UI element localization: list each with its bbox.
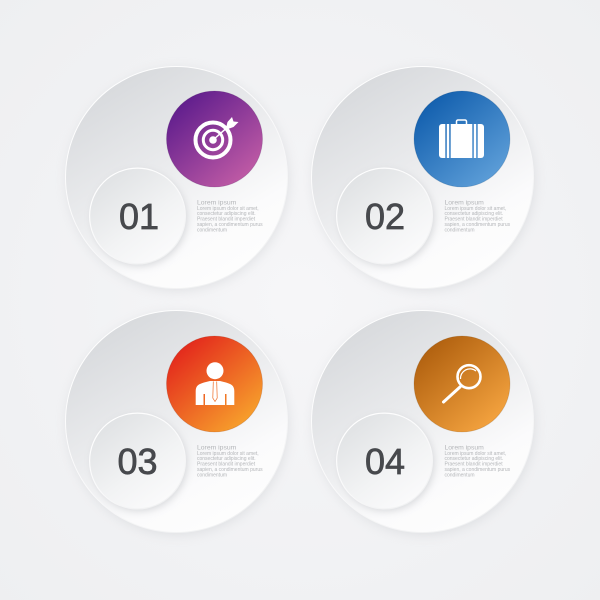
panel disc 01	[65, 66, 288, 290]
panel: step 03	[65, 310, 288, 534]
text block 02: sapien, a condimentum purus	[444, 222, 511, 228]
text block 02: condimentum	[444, 228, 475, 234]
text block 04: Praesent blandit imperdiet	[444, 462, 503, 468]
small number disc 04	[336, 412, 434, 511]
text block 03: consectetur adipiscing elit.	[197, 456, 256, 462]
text block 01: sapien, a condimentum purus	[197, 222, 263, 228]
text block 01: Lorem ipsum	[197, 200, 237, 206]
small number disc 03	[89, 412, 187, 511]
number 04: 04	[365, 441, 405, 482]
text block 04: sapien, a condimentum purus	[444, 467, 511, 473]
colored circle: blue	[414, 91, 510, 187]
text block 03: Lorem ipsum	[197, 444, 237, 452]
text block 04	[444, 444, 511, 478]
text block 03: condimentum	[197, 472, 227, 478]
text block 04: consectetur adipiscing elit.	[444, 456, 503, 462]
text block 03: Lorem ipsum dolor sit amet,	[197, 451, 259, 457]
number 01: 01	[119, 196, 159, 237]
text block 03: Praesent blandit imperdiet	[197, 462, 256, 468]
icon: businessman	[196, 362, 234, 405]
colored circle: purple	[166, 91, 262, 187]
text block 04: Lorem ipsum	[444, 444, 484, 452]
panel: step 02	[311, 66, 534, 290]
panel disc 04	[311, 310, 534, 534]
text block 01: Praesent blandit imperdiet	[197, 216, 256, 222]
text block 01	[197, 200, 263, 234]
panel: step 01	[65, 66, 288, 290]
text block 02: Praesent blandit imperdiet	[444, 216, 503, 222]
text block 04: condimentum	[444, 472, 475, 478]
panel disc 03	[65, 310, 288, 534]
text block 03: sapien, a condimentum purus	[197, 467, 263, 473]
panel: step 04	[311, 310, 534, 534]
text block 01: condimentum	[197, 228, 227, 234]
text block 04: Lorem ipsum dolor sit amet,	[444, 451, 506, 457]
text block 01: Lorem ipsum dolor sit amet,	[197, 206, 259, 212]
text block 02	[444, 200, 511, 234]
number 03: 03	[117, 441, 158, 482]
text block 01: consectetur adipiscing elit.	[197, 211, 256, 217]
icon: suitcase	[439, 120, 484, 158]
small number disc 01	[89, 168, 187, 266]
panel disc 02	[311, 66, 534, 290]
colored circle: red	[166, 336, 262, 432]
small number disc 02	[336, 168, 434, 266]
text block 02: Lorem ipsum	[444, 200, 484, 206]
icon: magnifier	[444, 365, 480, 402]
colored circle: orange	[414, 336, 510, 432]
number 02: 02	[365, 196, 405, 237]
icon: target	[196, 117, 238, 158]
text block 02: consectetur adipiscing elit.	[444, 211, 503, 217]
text block 03	[197, 444, 263, 478]
text block 02: Lorem ipsum dolor sit amet,	[444, 206, 506, 212]
